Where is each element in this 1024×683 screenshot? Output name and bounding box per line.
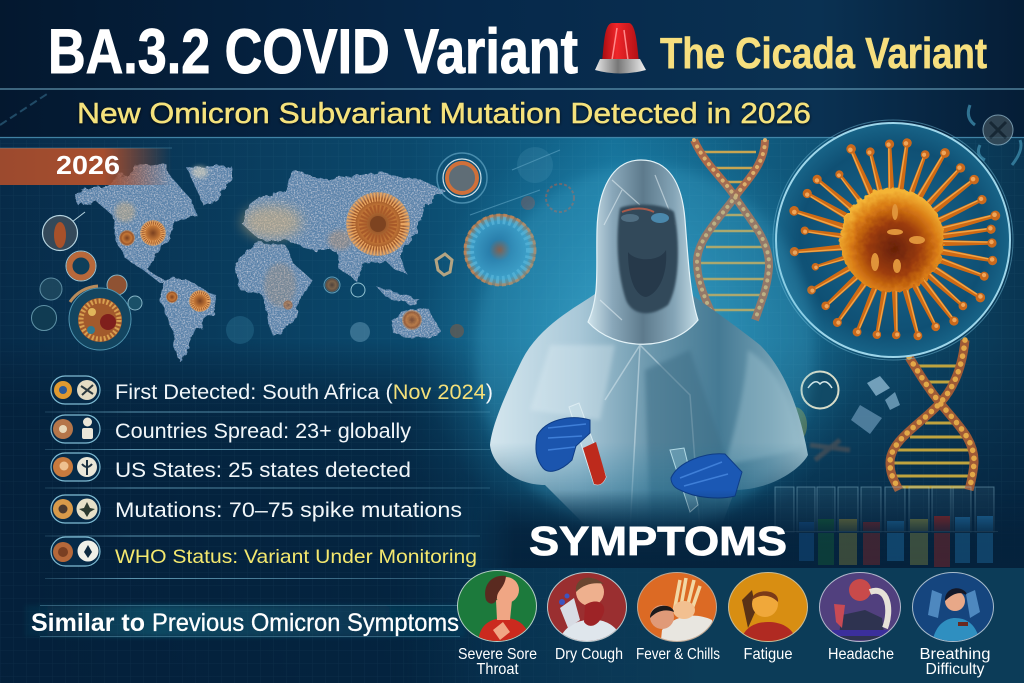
symptom: severe sore throat: Throat (476, 661, 519, 678)
symptom: dry cough (547, 572, 627, 663)
top-right microbe (968, 105, 1021, 165)
tube reflections (799, 533, 993, 567)
fact: countries spread: Countries Spread: 23+ globally (115, 420, 412, 443)
fact: mutations (51, 495, 462, 523)
icon: fatigue (728, 572, 808, 645)
year banner: 2026 (56, 150, 120, 180)
clear test tube (670, 448, 698, 512)
icon: fever (637, 572, 717, 642)
hood (588, 160, 698, 344)
icon: sore throat (457, 570, 537, 645)
header band (0, 0, 1024, 138)
red test tube (569, 403, 606, 485)
background (0, 138, 1024, 683)
symptoms band (440, 490, 1024, 683)
right map decorations (226, 147, 574, 344)
world map (73, 163, 445, 360)
fact: who status (51, 537, 477, 568)
symptom: fatigue (728, 572, 808, 663)
scientist figure (475, 160, 815, 535)
label: breathing difficulty: Breathing (920, 646, 990, 663)
similar to previous omicron: Similar to (31, 609, 145, 637)
symptom: fever and chills (636, 572, 720, 663)
subtitle: detected: New Omicron Subvariant Mutation Detected in 2026 (77, 98, 811, 130)
fact: mutations: Mutations: 70–75 spike mutations (115, 499, 462, 522)
symptom: severe sore throat (457, 570, 537, 678)
label: fatigue: Fatigue (744, 646, 793, 663)
fact: us states: US States: 25 states detected (115, 459, 411, 482)
symptom: headache (819, 572, 901, 663)
symptom: breathing difficulty (912, 572, 994, 678)
label: dry cough: Dry Cough (555, 646, 623, 663)
label: severe sore throat: Severe Sore (458, 646, 537, 663)
icon: headache (819, 572, 901, 642)
label: fever and chills: Fever & Chills (636, 646, 720, 663)
icon: alarm siren (595, 23, 646, 74)
fact: countries spread (51, 415, 412, 443)
right glove (671, 454, 742, 498)
protective suit body (490, 292, 808, 530)
lab decorations right (783, 372, 900, 460)
virus spikes (788, 138, 1001, 341)
test tube rack (770, 487, 998, 532)
fact: who status: WHO Status: Variant Under Monitoring (115, 546, 477, 568)
similar to previous omicron (25, 605, 465, 637)
year banner (0, 148, 172, 185)
map hotspots (119, 192, 422, 330)
fact list (45, 376, 493, 578)
virus lens (773, 120, 1013, 360)
fact: first detected: First Detected: South Africa ( Nov 2024) (115, 381, 493, 404)
icon: dry cough (547, 572, 627, 645)
label: headache: Headache (828, 646, 894, 663)
DNA helix lower (890, 340, 975, 490)
similar to previous omicron: Previous Omicron Symptoms (152, 609, 459, 637)
icon: breathing (912, 572, 994, 645)
fact: us states (51, 453, 411, 482)
symptom: breathing difficulty: Difficulty (926, 661, 984, 678)
DNA helix upper (694, 140, 769, 320)
left virus thumbnails (32, 212, 142, 350)
virus core (840, 188, 944, 292)
left glove (536, 418, 590, 471)
symptoms heading: SYMPTOMS (529, 518, 787, 564)
title: BA.3.2 COVID Variant (48, 17, 578, 87)
